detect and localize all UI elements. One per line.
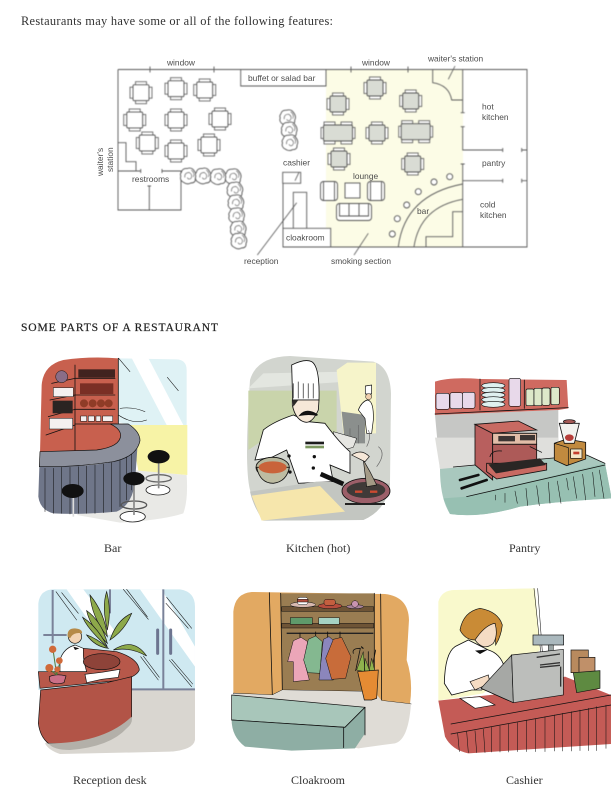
floor plan [118,66,527,255]
floor plan labels: waiter's [95,148,105,177]
floor plan labels: kitchen [480,210,507,220]
folded clothes [290,618,312,624]
floor plan labels: pantry [482,158,506,168]
cash register [481,635,564,703]
window frames [43,589,195,689]
counter [438,677,611,753]
paper slip [460,697,495,708]
counter gray [250,482,390,521]
frying pan [321,452,390,504]
pale table top [252,486,345,521]
caption: cloakroom: Cloakroom [291,773,346,787]
floor plan labels: kitchen [482,112,509,122]
floor plan labels: reception [244,256,279,266]
floor plan labels: lounge [353,171,378,181]
floor plan labels: restrooms [132,174,169,184]
closet interior [281,593,374,692]
floor plan labels: window [166,58,196,68]
window light [337,363,376,433]
green wall [248,391,337,450]
floor plan labels: waiter's station [427,54,483,64]
floor plan labels: smoking section [331,256,391,266]
cashier person [444,608,504,695]
window [117,358,187,425]
desk front [38,677,132,744]
caption: reception desk: Reception desk [73,773,147,787]
floor plan labels [95,54,509,266]
leader lines [257,66,455,255]
stools [62,450,171,522]
red wall with shelves [40,357,130,453]
hats [290,597,364,609]
receptionist [60,628,87,672]
bar stools [389,174,453,237]
floor plan labels: cold [480,200,496,210]
dining tables, non-smoking [124,78,231,162]
floor plan labels: hot [482,102,494,112]
grinder [554,420,586,466]
counter top [39,424,140,467]
desk top [38,648,139,688]
rail [287,631,373,635]
espresso handles [460,475,487,488]
open book [85,669,120,683]
ledge behind chef [333,432,357,452]
background [247,356,391,521]
floor plan labels: bar [417,206,429,216]
floor plan labels: cashier [283,158,310,168]
floor plan labels: station [105,147,115,172]
illustration: cashier [438,588,611,753]
cups, plates, glasses [436,378,559,409]
caption: cashier: Cashier [506,773,543,787]
plants [180,110,298,249]
floor plan labels: window [361,58,391,68]
flowers [45,646,66,684]
floor [77,470,187,523]
card box [571,650,600,693]
caption: pantry: Pantry [509,541,540,555]
illustration: cloakroom [232,592,411,751]
floor [232,690,411,748]
umbrella stand [353,647,378,700]
chef [255,361,350,483]
glass wall [38,589,195,690]
caption: kitchen (hot): Kitchen (hot) [286,541,350,555]
orange walls [233,592,411,704]
heading: some parts of a restaurant: SOME PARTS OF A RESTAURANT [21,321,218,334]
bowl [256,457,289,483]
gray wall [435,410,558,472]
plant [83,592,147,656]
counter [232,695,365,727]
coffee machine [475,421,547,480]
illustration: hot kitchen [247,356,391,521]
floor [45,689,195,754]
dining tables, smoking [321,77,433,175]
red shelves [435,378,568,415]
hanging garments [288,632,351,682]
back cook [342,385,373,443]
outer walls [118,66,527,247]
shelves and bottles [46,358,118,450]
counter [440,455,611,515]
illustration: reception desk [38,589,195,754]
shelves [282,607,374,628]
counter front [38,448,137,514]
floor plan labels: buffet or salad bar [248,73,316,83]
smoking section shading [326,70,463,247]
title: intro sentence: Restaurants may have some or all of the following features: [21,14,333,28]
yellow wall [130,425,187,475]
steam [350,425,382,467]
floor plan labels: cloakroom [286,232,325,242]
yellow wall [438,588,540,701]
illustration: bar [38,357,187,523]
lounge furniture [320,182,384,220]
illustration: pantry [435,378,611,515]
caption: bar: Bar [104,541,121,555]
